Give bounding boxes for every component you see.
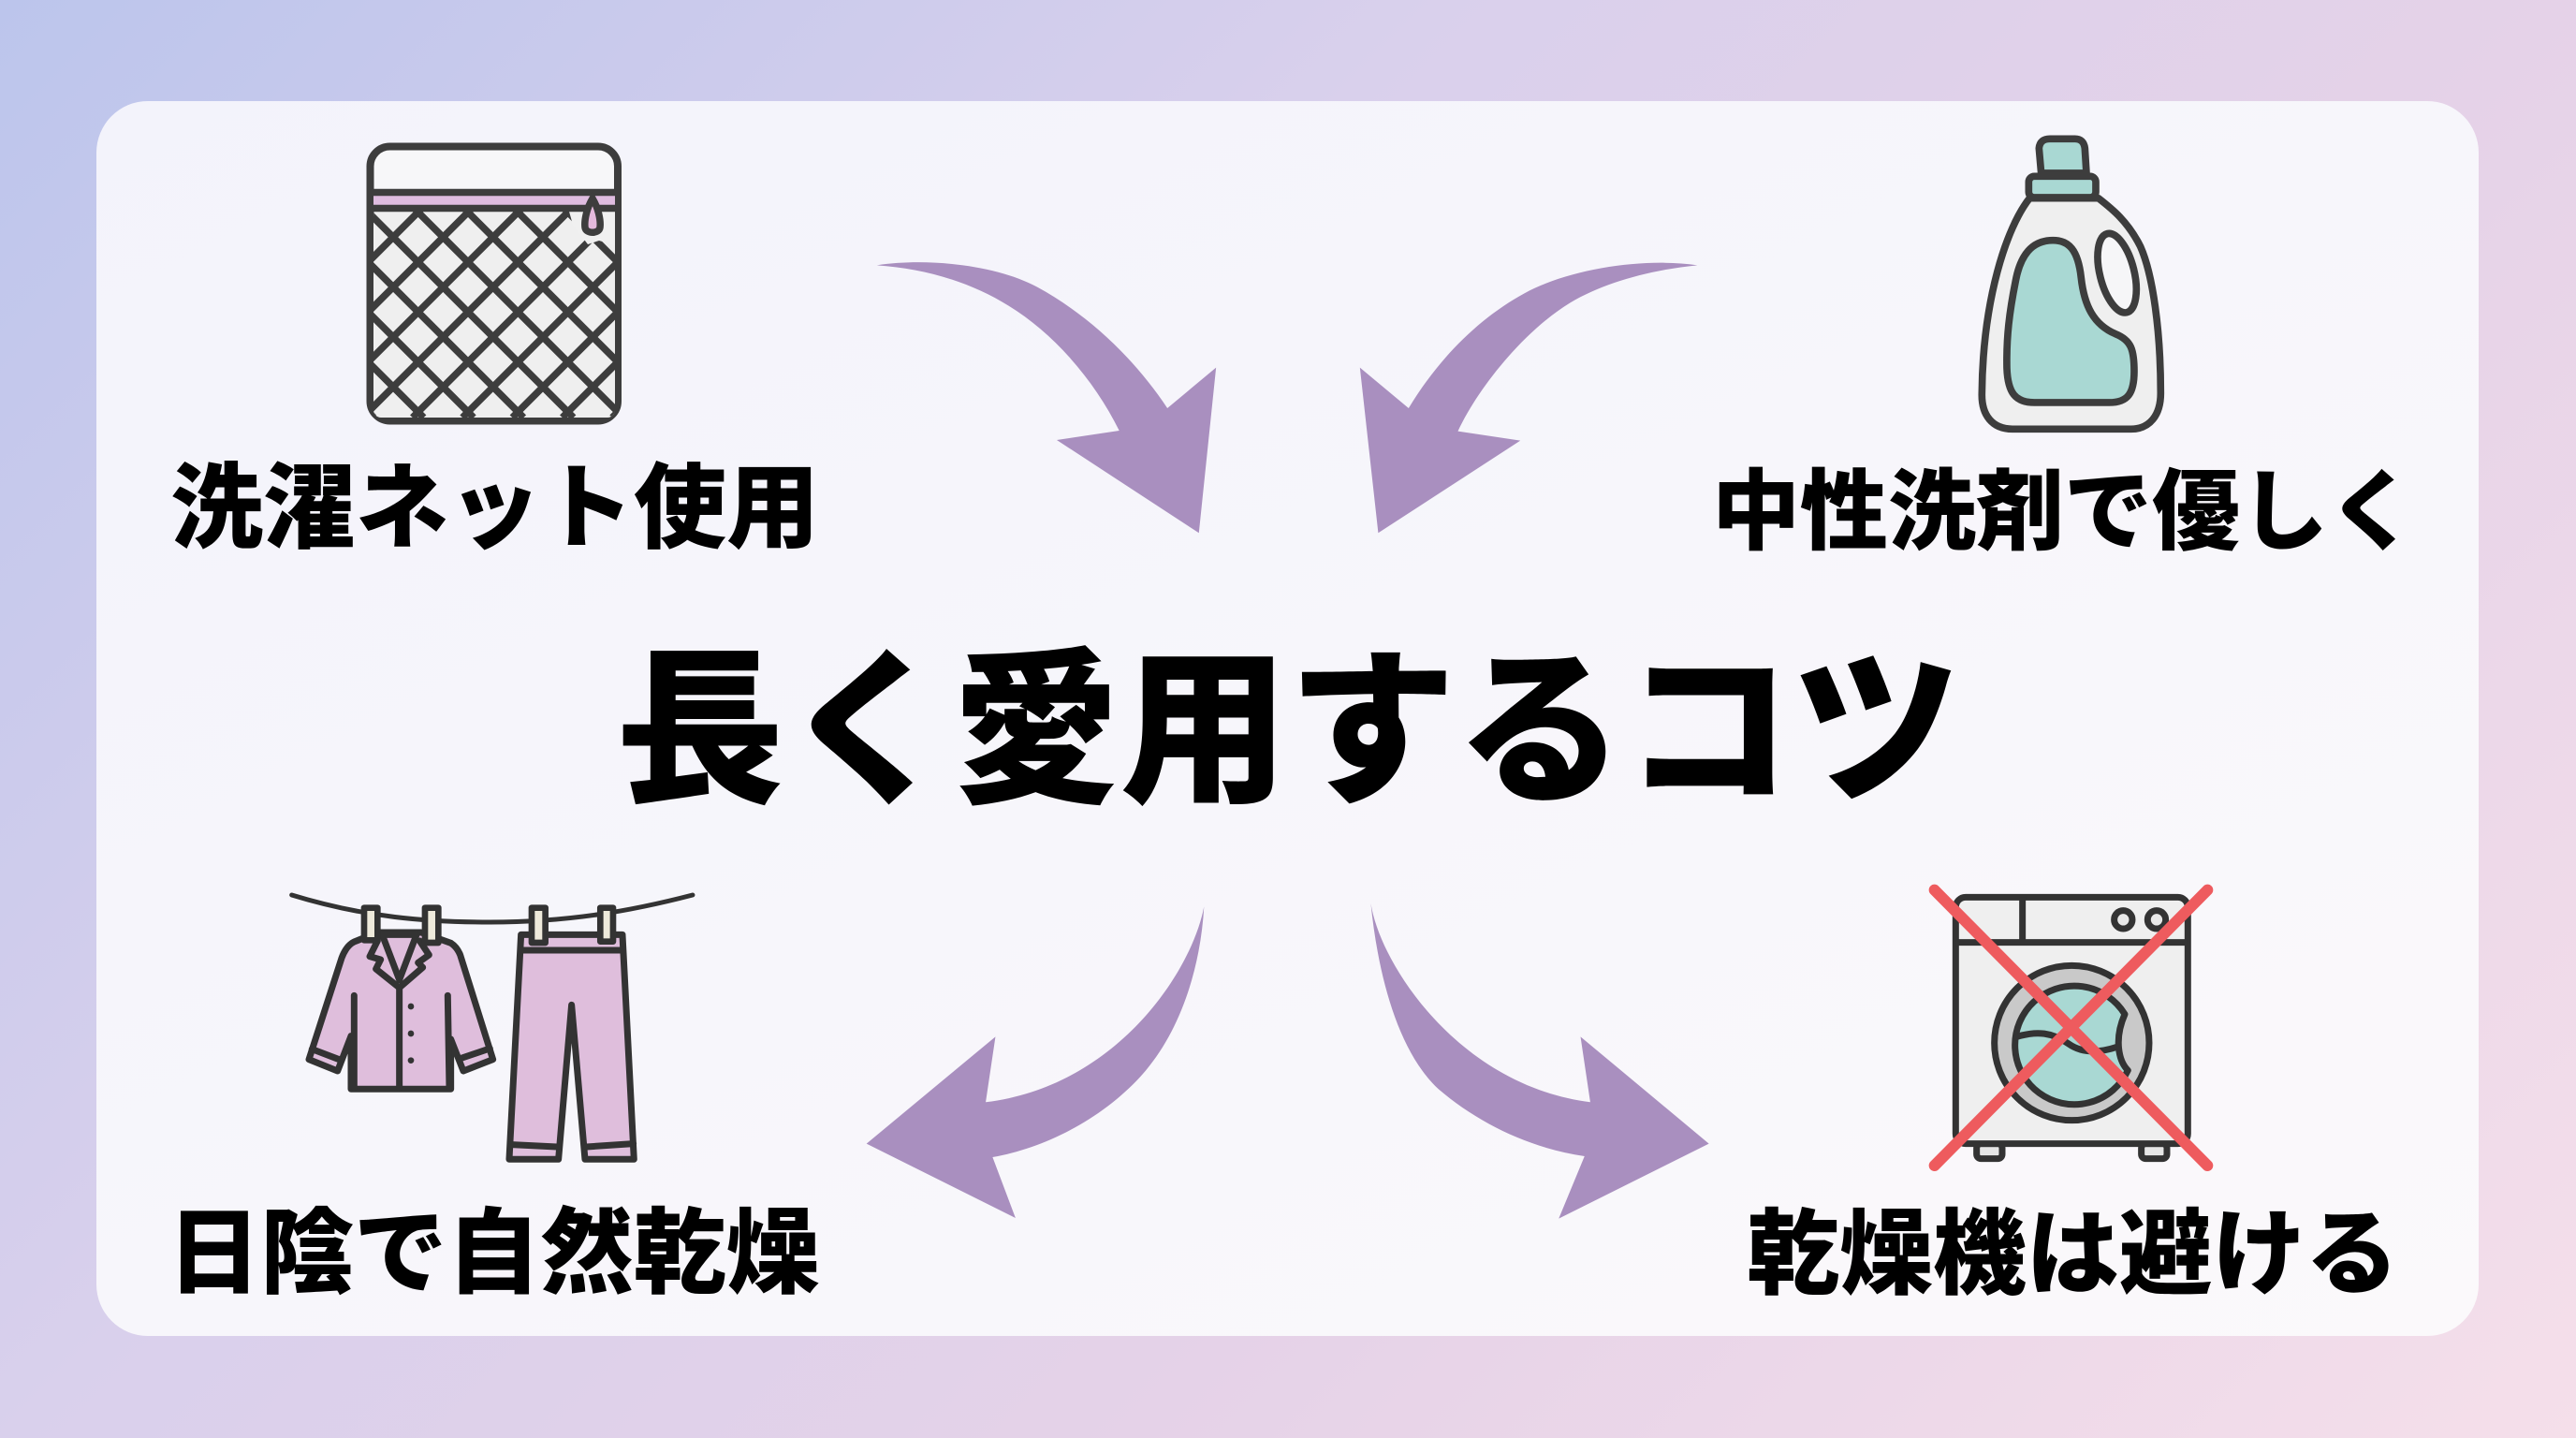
label: avoid dryer: 乾燥機は避ける xyxy=(1747,1203,2398,1307)
icon: laundry net xyxy=(367,142,622,425)
icon: tumble dryer crossed out xyxy=(1935,890,2207,1166)
icon: pajamas on clothesline xyxy=(292,895,693,1159)
panel: main card xyxy=(96,101,2479,1336)
icon: detergent bottle xyxy=(1982,139,2160,429)
arrow: top-left to centre xyxy=(877,262,1216,533)
title: 長く愛用するコツ xyxy=(616,638,1960,826)
label: shade drying: 日陰で自然乾燥 xyxy=(168,1202,820,1306)
label: laundry net: 洗濯ネット使用 xyxy=(170,456,819,560)
label: mild detergent: 中性洗剤で優しく xyxy=(1712,462,2416,561)
arrow: top-right to centre xyxy=(1360,263,1697,533)
arrow: centre to bottom-left xyxy=(867,906,1204,1218)
arrow: centre to bottom-right xyxy=(1370,903,1709,1219)
